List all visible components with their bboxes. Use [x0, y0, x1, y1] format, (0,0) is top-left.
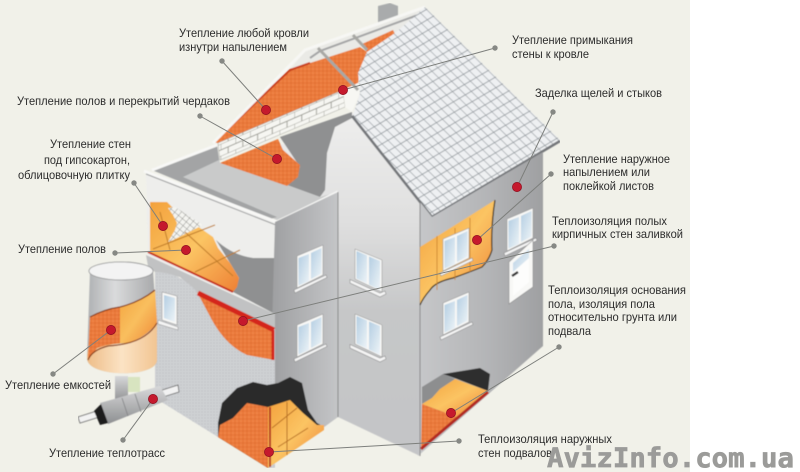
label: floor base: подвала: [548, 324, 591, 338]
callout line: basement walls: [264, 438, 462, 457]
house illustration: [78, 3, 560, 468]
windows: [294, 245, 327, 293]
label: floor base: Теплоизоляция основания: [548, 283, 686, 297]
label: exterior insulation: напылением или: [563, 165, 650, 179]
callout line: joints: [512, 109, 556, 192]
right wall: [418, 152, 543, 456]
roof ridge frame: [213, 7, 425, 143]
label: walls under drywall: [18, 137, 131, 182]
door: [509, 240, 533, 304]
label: basement walls: стен подвалов: [478, 446, 552, 460]
label: basement walls: Теплоизоляция наружных: [478, 432, 612, 446]
floor slab: [148, 252, 233, 292]
floor tile joints: [153, 212, 240, 276]
label: wall to roof joint: [512, 33, 633, 61]
callout line: attic floors: [197, 113, 282, 164]
label: attic floors: Утепление полов и перекрытий чердаков: [17, 94, 230, 108]
corner edge: [338, 192, 420, 456]
label: floor base: [548, 283, 686, 338]
lower left brick wall: [155, 272, 275, 468]
label: any roof: изнутри напылением: [179, 40, 287, 54]
label: exterior insulation: поклейкой листов: [563, 179, 654, 193]
callout line: exterior: [472, 171, 554, 245]
right wall orange panel: [420, 200, 495, 305]
attic floor: [153, 145, 338, 220]
callout line: roof: [219, 58, 271, 115]
lower attic spray insulation: [220, 139, 300, 186]
basement tiles: [422, 379, 488, 417]
bottom corner black layer: [218, 377, 324, 468]
callout lines and dots: [50, 45, 562, 457]
label: cavity walls: Теплоизоляция полых: [552, 214, 667, 228]
callout line: pipelines: [120, 394, 158, 443]
label: floor base: пола, изоляция пола: [548, 297, 655, 311]
label: floor base: относительно грунта или: [548, 310, 677, 324]
label: walls under drywall: под гипсокартон,: [44, 153, 130, 167]
callout line: tanks: [50, 325, 116, 377]
label: any roof: Утепление любой кровли: [179, 26, 309, 40]
left small window: [162, 292, 177, 325]
label: walls under drywall: Утепление стен: [50, 137, 131, 151]
label: any roof: [179, 26, 309, 54]
basement dark layer: [443, 368, 490, 391]
callout line: drywall: [131, 180, 168, 231]
label: floors: Утепление полов: [18, 242, 106, 256]
lower spray insulation: [197, 292, 274, 360]
roof edge: [352, 116, 560, 217]
label: exterior insulation: [563, 152, 670, 193]
front wall: [268, 192, 338, 468]
label: pipelines: Утепление теплотрасс: [49, 446, 165, 460]
interior insulation: [150, 202, 239, 292]
label: walls under drywall: облицовочную плитку: [18, 168, 130, 182]
chimney: [378, 3, 398, 28]
front left parapet face: [146, 171, 275, 314]
upper roof spray insulation: [362, 30, 395, 52]
label: cavity walls: [552, 214, 683, 241]
pipe connection: [128, 377, 140, 392]
basement spray: [421, 392, 488, 449]
white insulation cap: [343, 83, 360, 112]
label: joints: Заделка щелей и стыков: [535, 86, 662, 100]
parapet rim: [144, 171, 338, 222]
heating pipeline: [78, 376, 179, 425]
attic grey wall: [280, 112, 352, 197]
red membrane edge: [214, 63, 310, 142]
label: tanks: Утепление емкостей: [5, 378, 111, 392]
label: wall to roof joint: Утепление примыкания: [512, 33, 633, 47]
label: cavity walls: кирпичных стен заливкой: [552, 227, 683, 241]
gable wall: [270, 112, 432, 456]
white brick band: [218, 90, 345, 160]
roof rim backing: [290, 7, 425, 70]
label: exterior insulation: Утепление наружное: [563, 152, 670, 166]
callout line: cavity walls: [238, 243, 557, 326]
bottom corner tiles: [268, 400, 324, 468]
label: wall to roof joint: стены к кровле: [512, 47, 589, 61]
callout line: wall to roof: [338, 45, 498, 95]
red membrane strip: [198, 293, 274, 330]
callout line: floors: [112, 245, 191, 256]
bottom corner spray: [218, 403, 268, 468]
storage tank: [87, 262, 157, 373]
basement cut-out grey: [422, 374, 455, 404]
tiled roof: [352, 7, 560, 216]
grey shadow of left face: [216, 240, 275, 314]
label: basement walls: [478, 432, 612, 460]
callout line: floor base: [446, 344, 562, 418]
parapet inner wall: [152, 145, 277, 219]
roof spray insulation: [213, 47, 367, 143]
roof trusses: [318, 35, 367, 90]
mosaic tile net: [168, 207, 203, 242]
